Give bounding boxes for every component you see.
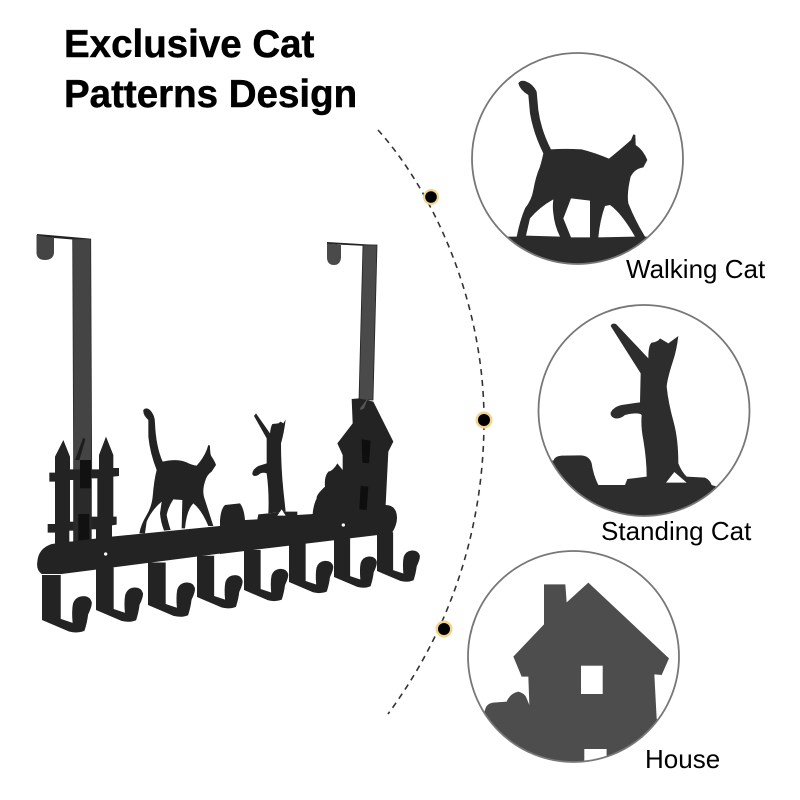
circle outline xyxy=(472,53,683,264)
hanger slots xyxy=(359,397,371,510)
screw hole xyxy=(342,523,345,527)
hook 4 xyxy=(197,556,243,608)
house door xyxy=(584,749,607,760)
dashed arc with marker dots xyxy=(378,130,492,714)
walking cat silhouette xyxy=(139,408,216,533)
hook 3 xyxy=(148,562,195,617)
left door hanger xyxy=(36,234,92,545)
house window xyxy=(581,666,603,694)
right door hanger xyxy=(327,242,377,400)
hook 2 xyxy=(96,568,143,622)
left part: fence, walking cat, plate xyxy=(37,408,240,574)
title xyxy=(64,23,357,116)
marker dot: standing cat xyxy=(476,412,492,428)
walking cat artwork xyxy=(508,80,648,264)
title: Exclusive Cat xyxy=(64,23,315,66)
hook 6 xyxy=(289,542,333,593)
standing cat artwork xyxy=(552,324,716,516)
house artwork xyxy=(484,582,669,762)
standing cat silhouette xyxy=(252,413,286,513)
panel: house detail xyxy=(467,551,720,774)
right part: tombstone, standing cat, castle house xyxy=(220,397,397,554)
mounting plate and house outline xyxy=(220,398,397,554)
marker dot: house xyxy=(436,620,452,638)
screw hole xyxy=(104,552,107,556)
title: Patterns Design xyxy=(64,73,357,116)
triangular cut-out xyxy=(666,472,687,483)
hook 8 xyxy=(377,532,420,582)
label: Walking Cat: Walking Cat xyxy=(626,254,766,284)
label: Standing Cat: Standing Cat xyxy=(601,516,752,546)
panel: walking cat detail xyxy=(472,53,766,284)
panel: standing cat detail xyxy=(537,305,752,546)
triangular cut-out xyxy=(277,509,286,516)
eight hooks xyxy=(42,532,420,632)
over-door hook rack xyxy=(36,234,420,632)
hook 5 xyxy=(244,550,288,601)
label: House: House xyxy=(645,744,720,774)
hook 1 xyxy=(42,575,92,632)
marker dot: walking cat xyxy=(423,189,439,205)
circle outline xyxy=(538,305,750,516)
picket fence xyxy=(48,437,119,547)
hook 7 xyxy=(334,538,377,588)
circle outline xyxy=(468,551,679,762)
mounting plate left xyxy=(37,524,240,574)
